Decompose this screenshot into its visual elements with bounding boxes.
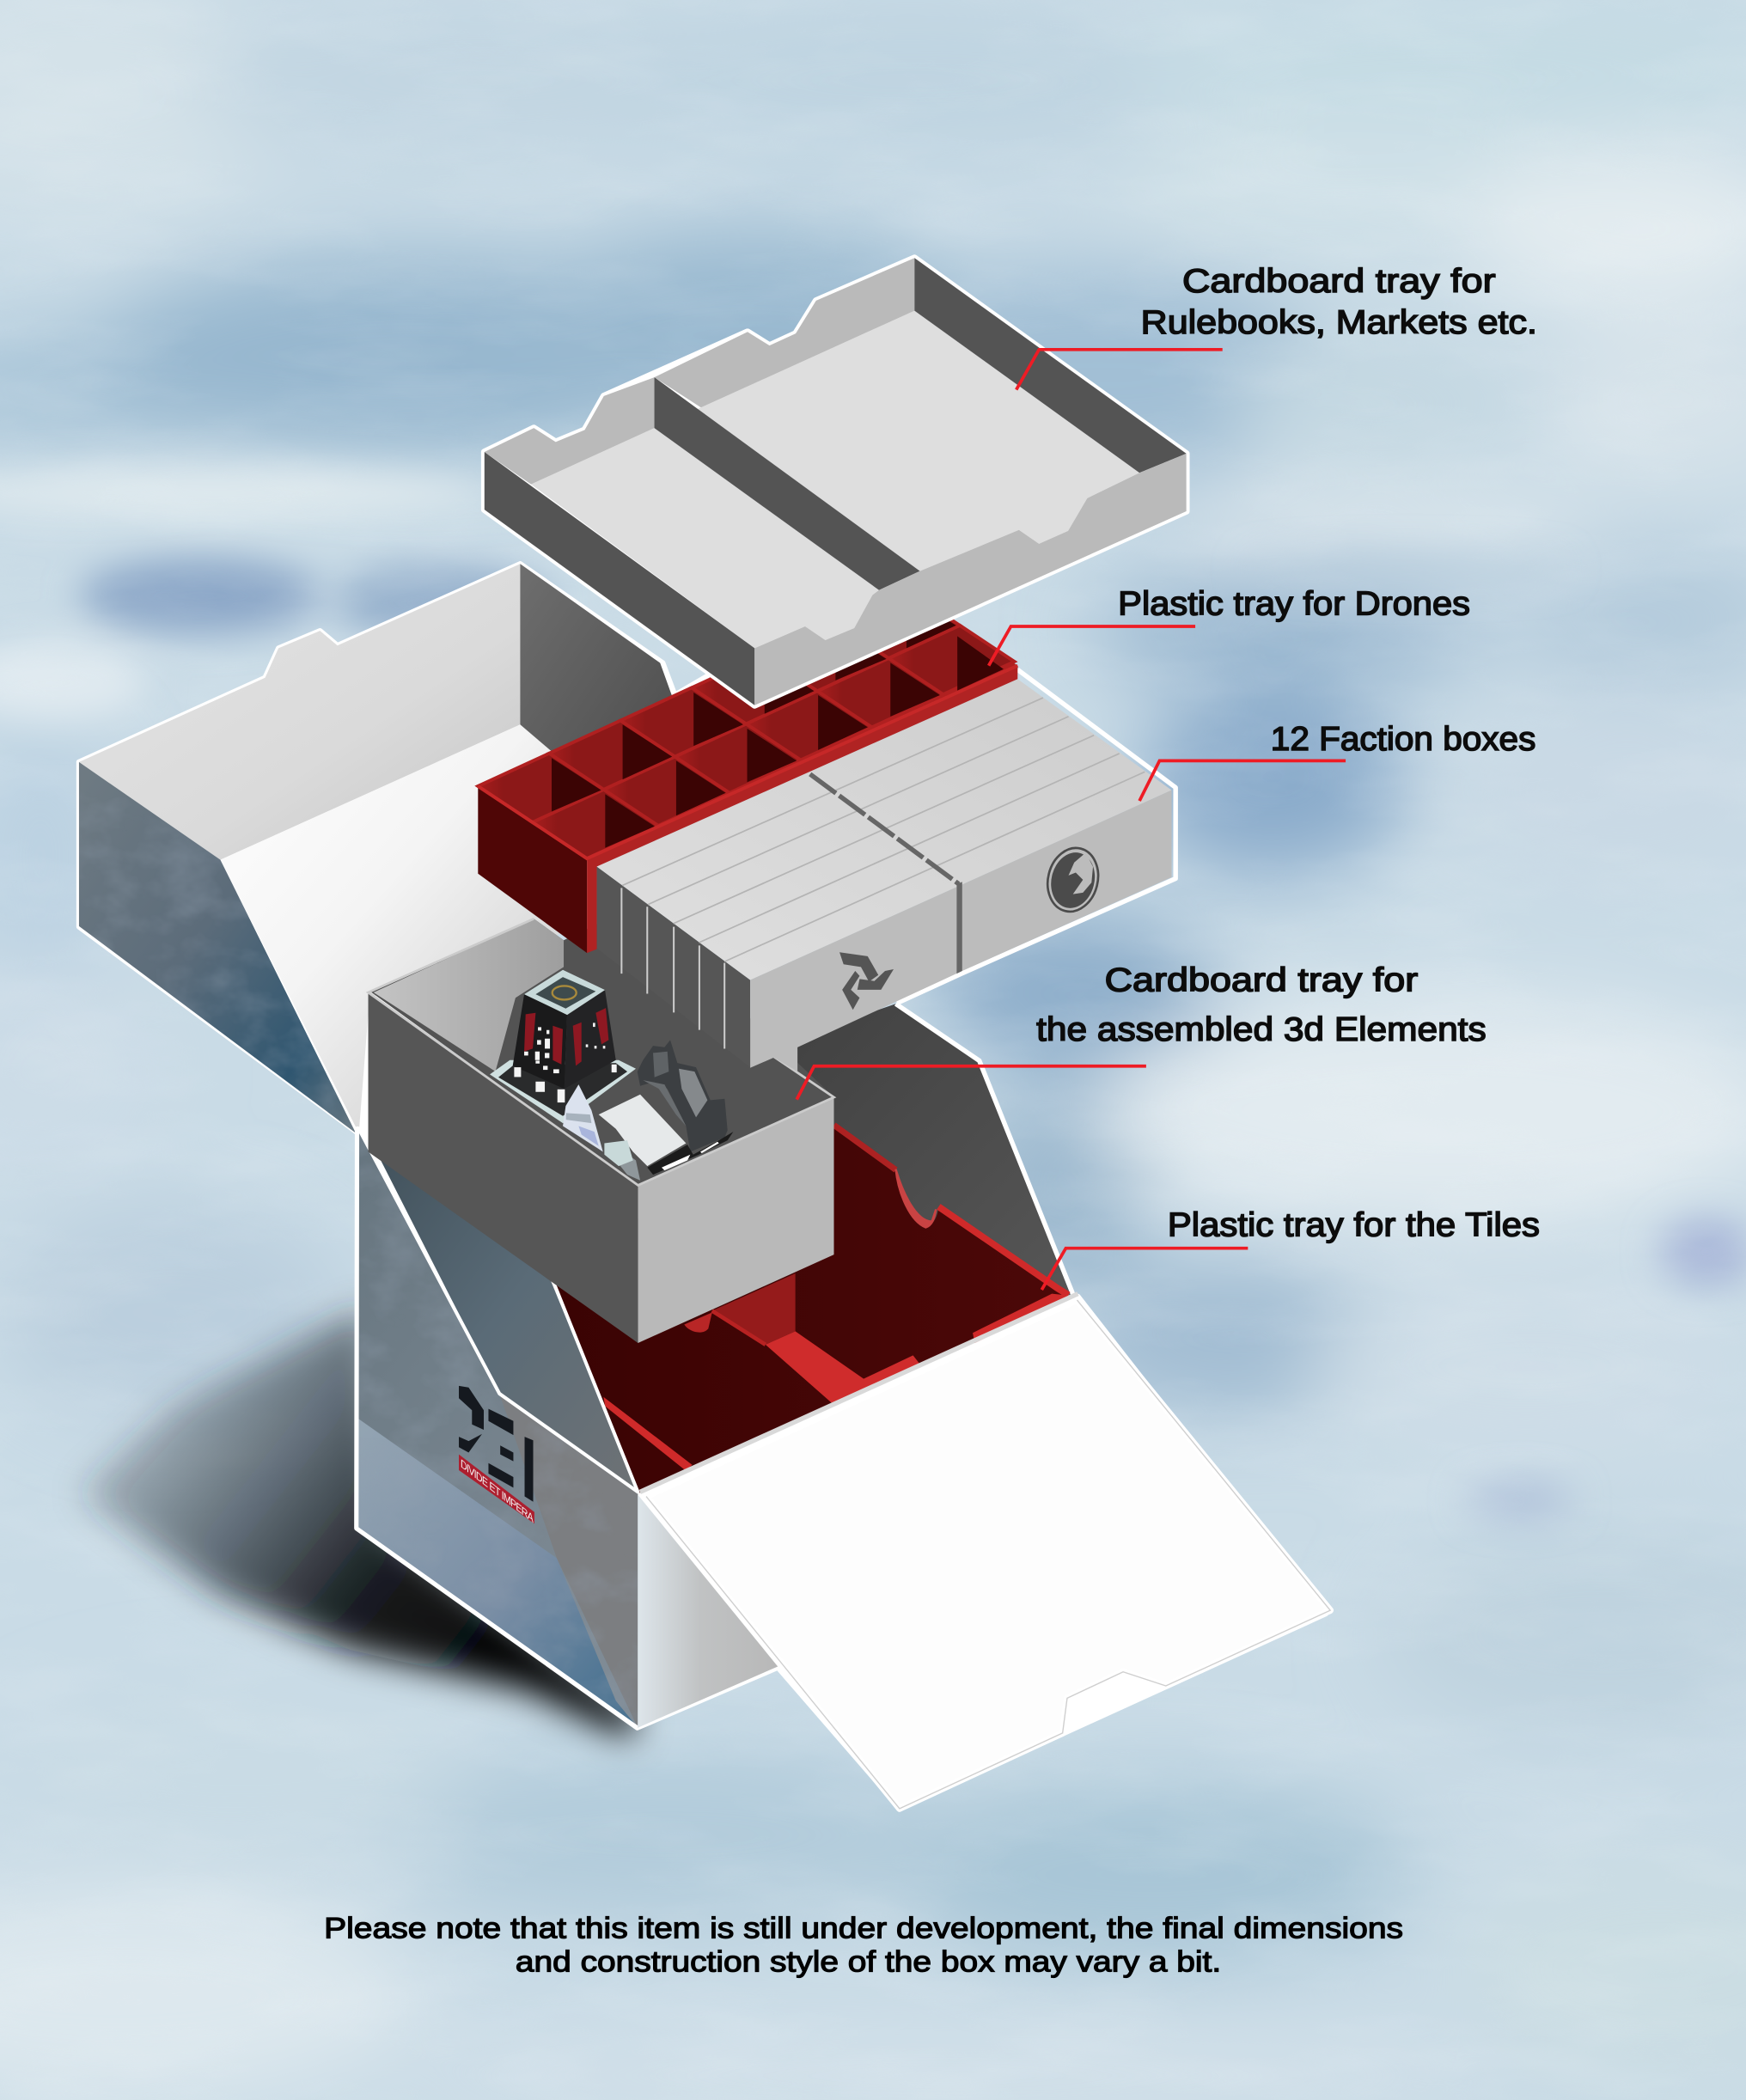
boxes white outline xyxy=(897,669,1175,1003)
bird logo ring xyxy=(1041,843,1105,917)
tile tray small notch xyxy=(684,1313,712,1333)
bird logo disc xyxy=(1046,848,1101,913)
3d miniature: throne xyxy=(563,1040,733,1181)
box shadow on ground xyxy=(80,1306,638,1738)
open back lid of the box xyxy=(79,564,707,1136)
tray inner light wall xyxy=(374,919,564,1071)
obelisk right face xyxy=(565,990,616,1089)
logo marks xyxy=(459,1386,534,1502)
label: tiles tray: Plastic tray for the Tiles xyxy=(1168,1207,1540,1244)
lid inner back wall xyxy=(79,564,520,860)
leader: rulebooks tray xyxy=(1016,350,1223,390)
tile tray rim right edge xyxy=(938,1206,1069,1295)
label: rulebooks tray: Cardboard tray for xyxy=(1182,263,1496,300)
right sliver face xyxy=(638,1494,778,1728)
tray left outer face xyxy=(369,992,638,1343)
top tray floor xyxy=(531,311,1139,648)
label: 3d elements tray: Cardboard tray for xyxy=(1105,961,1418,998)
tile tray hinge lip right xyxy=(973,1294,1069,1343)
red tray long side lip xyxy=(587,666,1017,953)
development note line 2: and construction style of the box may vary a bit. xyxy=(516,1945,1221,1978)
throne wall highlights xyxy=(653,1052,668,1077)
faction boxes xyxy=(597,669,1175,1071)
red tray top xyxy=(478,589,1017,858)
throne seat xyxy=(599,1095,686,1166)
obelisk red panels xyxy=(524,1008,608,1065)
tile tray rim far edge xyxy=(833,1125,895,1170)
throne base xyxy=(647,1132,733,1175)
label: 3d elements tray line 2: the assembled 3d Elements xyxy=(1036,1011,1487,1048)
red tray back row cells xyxy=(478,589,960,822)
tile tray divider edge xyxy=(712,1310,766,1345)
leader: drones tray xyxy=(989,626,1195,666)
lid dark side wall xyxy=(520,564,672,791)
patterned mottling xyxy=(85,807,638,1718)
white front lid opened xyxy=(640,1294,1330,1809)
obelisk cap inner xyxy=(535,977,595,1009)
grey shard xyxy=(616,1151,640,1181)
cardboard tray for rulebooks xyxy=(485,258,1187,705)
leader: tiles tray xyxy=(1041,1248,1248,1290)
slat lines on top xyxy=(622,698,1145,961)
top tray far walls xyxy=(485,377,655,485)
right dark inner wall xyxy=(790,1004,1071,1297)
lid thin edge xyxy=(646,1300,1330,1809)
tray interior xyxy=(369,919,833,1185)
boxes left dark side xyxy=(597,866,750,1067)
obelisk plate inner xyxy=(498,1063,627,1116)
throne white highlights xyxy=(662,1142,719,1170)
leader: 3d elements tray xyxy=(797,1066,1146,1100)
icon: bird faction logo xyxy=(1041,843,1105,917)
red tray dark side xyxy=(478,786,587,953)
divider between the boxes xyxy=(956,882,962,974)
obelisk cap xyxy=(524,970,605,1015)
boxes front face xyxy=(750,791,1171,1071)
tile tray lower left strip xyxy=(603,1397,693,1470)
lid floor xyxy=(220,724,589,1133)
top tray far wall right part xyxy=(655,258,914,407)
logo: DEI xyxy=(459,1386,534,1526)
box lower body xyxy=(67,750,1326,1808)
obelisk cap emblem xyxy=(552,986,577,999)
obelisk white windows xyxy=(514,1023,617,1102)
top tray left outer face xyxy=(485,452,754,705)
slat separators xyxy=(621,888,724,1048)
right wall white edge xyxy=(895,1004,1074,1297)
icon: triskele faction logo xyxy=(839,952,894,1010)
front face right grey wedge xyxy=(499,1394,638,1728)
front face lower lighter band xyxy=(357,1418,638,1728)
tile tray divider top xyxy=(766,1331,919,1405)
obelisk left face xyxy=(513,994,567,1089)
boxes top surface xyxy=(597,679,1171,980)
development note xyxy=(324,1912,1403,1978)
top tray divider wall xyxy=(655,377,920,590)
side flap patterned xyxy=(365,1131,638,1492)
labels xyxy=(1036,263,1540,1244)
label: faction boxes: 12 Faction boxes xyxy=(1271,721,1535,758)
red tray cell shadows xyxy=(552,595,1004,848)
leader: faction boxes xyxy=(1139,760,1346,801)
top tray right inner wall xyxy=(914,258,1187,473)
cardboard tray for 3d elements xyxy=(369,919,833,1343)
label: drones tray: Plastic tray for Drones xyxy=(1118,585,1470,622)
leader lines xyxy=(797,350,1346,1290)
red tray front row cells xyxy=(533,626,1015,858)
white outline of the lid xyxy=(79,564,707,1136)
red tray top-left rim highlight xyxy=(478,666,1017,858)
top tray front outer face xyxy=(754,454,1187,705)
lid outer patterned face xyxy=(79,762,356,1133)
box white edges xyxy=(357,1129,638,1728)
logo banner text: DIVIDE ET IMPERA xyxy=(461,1456,534,1526)
3d miniature: obelisk xyxy=(490,970,636,1123)
crystal xyxy=(563,1084,603,1151)
body white outline xyxy=(357,1129,1326,1808)
top tray white outline xyxy=(485,258,1187,705)
tile tray divider riser xyxy=(712,1273,796,1345)
throne walls xyxy=(638,1040,728,1151)
crystal blue xyxy=(578,1126,599,1146)
tray front outer face xyxy=(638,1097,833,1343)
teal shard xyxy=(604,1140,633,1166)
lid hinge strip xyxy=(640,1294,1078,1492)
tray rim xyxy=(369,919,833,1185)
crystal band xyxy=(566,1113,591,1123)
label: rulebooks tray line 2: Rulebooks, Markets etc. xyxy=(1141,304,1537,341)
plastic tray for drones xyxy=(478,589,1017,953)
tile tray thumb notch xyxy=(895,1169,936,1228)
gap between box rows xyxy=(810,774,959,884)
red tile tray interior xyxy=(550,1127,1069,1493)
bird logo cutout xyxy=(1069,854,1093,894)
front patterned face xyxy=(357,1129,638,1728)
logo red banner xyxy=(459,1455,534,1523)
development note: Please note that this item is still under development, the final dimensions xyxy=(324,1912,1403,1944)
obelisk plate xyxy=(490,1060,636,1123)
